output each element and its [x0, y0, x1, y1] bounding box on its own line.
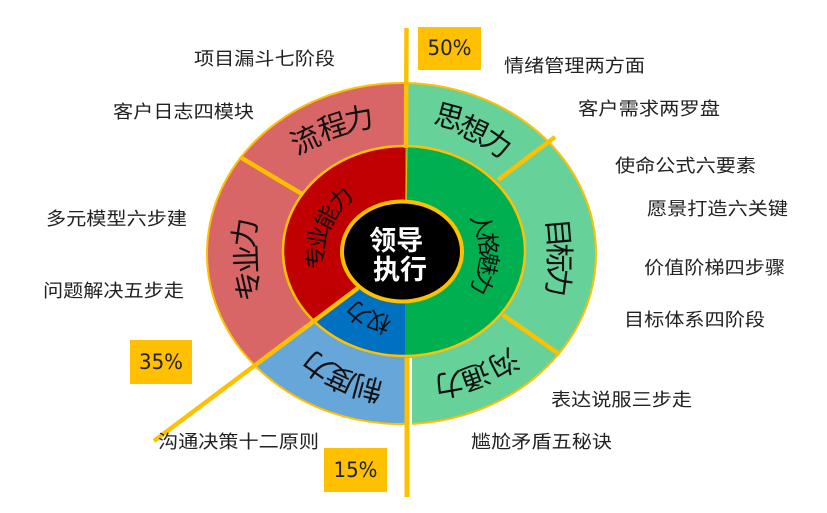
divider: goal / communication: [503, 315, 559, 354]
outer ring label: 目标力: 目: [540, 217, 574, 249]
centre title: 领导: [369, 226, 423, 256]
outer ring label: 流程力: 力: [342, 101, 376, 138]
middle ring label: 人格魅力: [465, 210, 503, 299]
middle ring label: 权力: [341, 296, 394, 338]
outer ring label: 沟通力: 通: [456, 355, 494, 395]
outer ring label: 目标力: [539, 217, 576, 298]
label: 情绪管理两方面: 情绪管理两方面: [504, 56, 645, 76]
axis: diagonal line: [154, 288, 358, 441]
middle segment: personality charm: [405, 144, 526, 358]
thin boundary inside middle ring: [406, 148, 407, 205]
outer ring label: 思想力: 想: [453, 109, 493, 152]
outer ring label: 流程力: 程: [314, 108, 352, 148]
label: 多元模型六步建: 多元模型六步建: [46, 209, 187, 229]
label: 项目漏斗七阶段: 项目漏斗七阶段: [194, 49, 335, 69]
axis: top vertical line: [404, 28, 409, 148]
callout: 35%: [130, 340, 192, 384]
outer ring label: 沟通力: 力: [432, 365, 466, 402]
centre title: 执行: [373, 255, 427, 285]
outer ring label: 沟通力: 沟: [482, 341, 524, 384]
outer ring label: 目标力: 力: [539, 266, 576, 298]
label: 客户需求两罗盘: 客户需求两罗盘: [578, 99, 720, 119]
outer ring label: 思想力: 力: [475, 122, 518, 165]
middle segment: professional ability: [282, 144, 405, 320]
white gap beside lower axis: [408, 358, 412, 428]
label: 愿景打造六关键: 愿景打造六关键: [647, 199, 788, 219]
middle ring label: 专业能力: 能: [310, 201, 344, 233]
callout: 35%: 35%: [139, 350, 183, 374]
outer segment: personality green: [405, 82, 597, 425]
divider: thought / goal: [498, 137, 555, 180]
label: 客户日志四模块: 客户日志四模块: [113, 102, 254, 122]
middle ring label: 人格魅力: 格: [474, 231, 502, 257]
panel: middle ring: [283, 146, 525, 356]
outer ring label: 制度力: 力: [296, 344, 339, 387]
middle ring label: 人格魅力: 魅: [473, 250, 503, 278]
label: 问题解决五步走: 问题解决五步走: [43, 281, 184, 301]
callout: 15%: 15%: [334, 458, 378, 482]
outer ring label: 目标力: 标: [542, 243, 575, 273]
outer segment: system blue: [256, 324, 405, 425]
middle ring label: 权力: 权: [364, 306, 394, 338]
outer ring label: 制度力: 度: [321, 357, 361, 400]
label: 目标体系四阶段: 目标体系四阶段: [624, 310, 765, 330]
outer ring label: 思想力: 思: [431, 99, 467, 137]
outer segment: professional red: [206, 82, 404, 364]
outer ring label: 专业力: 业: [232, 244, 264, 274]
label: 尴尬矛盾五秘诀: 尴尬矛盾五秘诀: [471, 432, 612, 452]
outer ring label: 流程力: [286, 101, 376, 162]
outer ring label: 制度力: 制: [350, 368, 386, 407]
middle ring label: 权力: 力: [341, 296, 375, 330]
middle ring label: 人格魅力: 人: [466, 210, 498, 240]
axis: bottom vertical line: [404, 358, 410, 497]
outer ring label: 专业力: 专: [230, 267, 269, 303]
panel: outer ring: [207, 83, 596, 424]
middle ring label: 专业能力: 专: [302, 244, 330, 270]
middle segment: power: [314, 288, 405, 358]
label: 价值阶梯四步骤: 价值阶梯四步骤: [644, 258, 785, 278]
outer ring label: 沟通力: [432, 341, 524, 402]
callout: 15%: [324, 448, 387, 492]
middle ring label: 专业能力: 力: [324, 182, 358, 216]
middle ring label: 专业能力: 业: [303, 223, 333, 251]
outer ring label: 专业力: 力: [227, 216, 264, 250]
divider lines: [154, 28, 559, 497]
middle ring label: 专业能力: [302, 182, 358, 270]
callout: 50%: 50%: [428, 36, 472, 60]
divider: process / expertise: [240, 157, 302, 194]
outer ring label: 制度力: [296, 344, 386, 407]
label: 沟通决策十二原则: 沟通决策十二原则: [158, 432, 319, 452]
label: 使命公式六要素: 使命公式六要素: [615, 156, 756, 176]
outer ring label: 专业力: [227, 216, 269, 303]
callout: 50%: [418, 27, 481, 70]
outer ring label: 思想力: [431, 99, 518, 165]
outer ring label: 流程力: 流: [286, 119, 326, 162]
middle ring label: 人格魅力: 力: [465, 267, 499, 299]
centre circle: [342, 202, 462, 302]
label: 表达说服三步走: 表达说服三步走: [551, 390, 692, 410]
